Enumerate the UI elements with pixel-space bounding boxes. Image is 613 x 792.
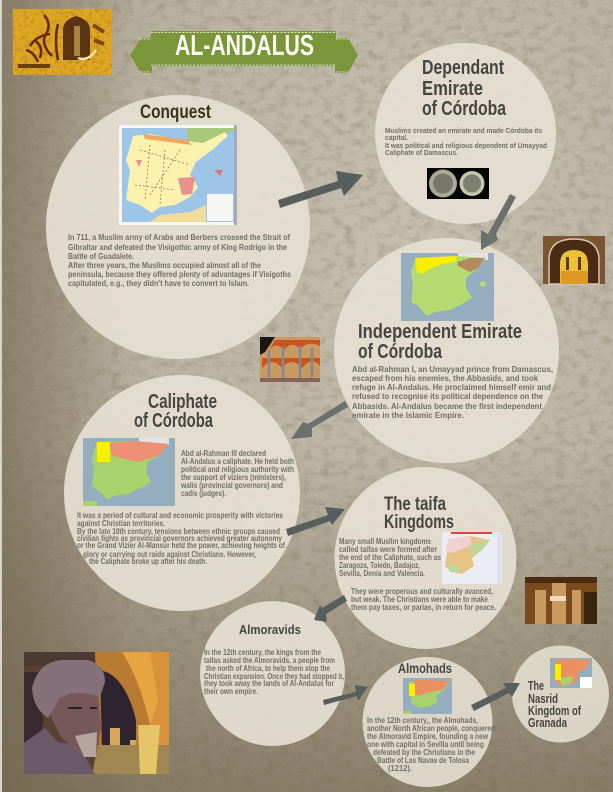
- text: caliphate right column: walis (provincial governors) and: [180, 481, 283, 490]
- text: conquest: peninsula, because they offered plenty of advantages if Visigoths: [68, 270, 291, 279]
- heading: almoravids: Almoravids: [239, 622, 301, 637]
- text: caliphate right column: Abd al-Rahman III declared: [181, 449, 266, 458]
- heading: taifa kingdoms: Kingdoms: [384, 512, 454, 533]
- text: almohads: another North African people, conquered: [367, 724, 495, 733]
- text: conquest: capitulated, e.g., they didn't have to convert to Islam.: [68, 279, 249, 288]
- text: taifa left column: called taifas were formed after: [339, 545, 437, 554]
- text: independent emirate: refuge in Al-Andalus. He proclaimed himself emir and: [352, 382, 551, 392]
- text: caliphate right column: cadis (judges).: [181, 489, 226, 498]
- text: taifa left column: Sevilla, Denia and Valencia.: [339, 569, 425, 578]
- arrow: caliphate to taifa: [286, 507, 345, 536]
- text: almohads: [367, 716, 495, 773]
- heading: nasrid kingdom: [528, 678, 581, 730]
- text: almohads: (1212).: [388, 764, 412, 773]
- heading: nasrid kingdom: Nasrid: [528, 691, 558, 706]
- arrow: almoravids to almohads: [323, 685, 368, 705]
- map: Iberian peninsula conquest: [119, 125, 237, 225]
- heading: caliphate: [134, 391, 217, 432]
- text: caliphate lower: civilian fights as provincial governors achieved greater autonomy: [77, 534, 282, 543]
- image: carved columns: [525, 577, 597, 624]
- text: independent emirate: escaped from his enemies, the Abbasids, and took: [352, 373, 538, 383]
- map: almohads: [403, 678, 452, 714]
- heading: almohads: Almohads: [398, 660, 452, 676]
- image: two coins: [427, 168, 489, 199]
- text: taifa lower: They were properous and culturally avanced,: [351, 587, 493, 596]
- text: caliphate lower: [77, 511, 285, 566]
- heading: taifa kingdoms: The taifa: [384, 494, 446, 515]
- text: almoravids: taifas asked the Almoravids, a people from: [204, 656, 335, 665]
- heading: independent emirate: Independent Emirate: [358, 321, 522, 343]
- panel: conquest: [46, 95, 310, 359]
- panel: taifa kingdoms: [334, 467, 516, 649]
- text: caliphate lower: or the Grand Vizier Al-Mansur held the power, achieving heights of: [77, 541, 285, 550]
- text: conquest: [68, 233, 291, 288]
- text: almohads: the Almoravid Empire, founding a new: [367, 732, 489, 741]
- text: dependant emirate: Caliphate of Damascus.: [385, 148, 458, 157]
- text: conquest: Battle of Guadalete.: [68, 252, 134, 261]
- heading: caliphate: Caliphate: [148, 391, 217, 413]
- text: caliphate right column: Al-Andalus a caliphate. He held both: [181, 457, 294, 466]
- image: golden calligraphy: [13, 9, 112, 75]
- heading: independent emirate: of Córdoba: [358, 341, 443, 363]
- map: independent emirate: [401, 253, 494, 321]
- text: dependant emirate: It was political and religious dependent of Umayyad: [385, 141, 547, 150]
- text: almohads: In the 12th century,, the Almohads,: [367, 716, 478, 725]
- arrow: conquest to dependant emirate: [278, 171, 363, 208]
- text: independent emirate: Abbasids. Al-Andalus became the first independent: [352, 401, 542, 411]
- text: conquest: In 711, a Muslim army of Arabs and Berbers crossed the Strait of: [68, 233, 290, 242]
- heading: taifa kingdoms: [384, 494, 454, 533]
- image: philosopher bust: [24, 652, 169, 774]
- text: caliphate lower: By the late 10th century, tensions between ethnic groups caused: [77, 527, 280, 536]
- text: taifa left column: the end of the Caliphate, such as: [339, 553, 441, 562]
- text: independent emirate: emirate in the Islamic Empire.: [352, 410, 464, 420]
- image: mosque columns: [260, 337, 320, 382]
- text: caliphate right column: political and religious authority with: [181, 465, 294, 474]
- panel: almohads: [362, 657, 495, 787]
- text: taifa left column: Zaragoza, Toledo, Badajoz,: [339, 561, 420, 570]
- title banner: [130, 30, 358, 73]
- heading: conquest: Conquest: [140, 101, 211, 123]
- heading: nasrid kingdom: Granada: [528, 715, 568, 730]
- text: caliphate right column: the support of viziers (ministers),: [181, 473, 286, 482]
- arrow: taifa to almoravids: [314, 595, 347, 622]
- panel: nasrid kingdom: [512, 646, 609, 742]
- heading: nasrid kingdom: Kingdom of: [528, 703, 581, 718]
- map: caliphate: [83, 438, 175, 506]
- text: taifa left column: Many small Muslim kingdoms: [339, 537, 431, 546]
- text: almoravids: the north of Africa, to help them stop the: [206, 664, 330, 673]
- text: conquest: Gibraltar and defeated the Visigothic army of King Rodrigo in the: [68, 243, 287, 252]
- panel: almoravids: [200, 601, 345, 746]
- text: caliphate lower: glory or carrying out raids against Christians. However,: [83, 550, 256, 559]
- text: independent emirate: refused to recognise its political dependence on the: [352, 391, 543, 401]
- text: independent emirate: [352, 364, 553, 420]
- text: caliphate right column: [180, 449, 294, 498]
- panel: dependant emirate: [375, 43, 556, 224]
- text: dependant emirate: Muslims created an emirate and made Córdoba its: [385, 126, 542, 135]
- heading: caliphate: of Córdoba: [134, 410, 214, 432]
- text: almoravids: [204, 648, 344, 696]
- arrow: almohads to nasrid: [471, 683, 520, 711]
- text: almohads: one with capital in Sevilla until being: [367, 740, 484, 749]
- arrow: independent emirate to caliphate: [291, 401, 348, 439]
- text: almoravids: In the 12th century, the kings from the: [204, 648, 321, 657]
- text: caliphate lower: It was a period of cultural and economic prosperity with victories: [77, 511, 283, 520]
- heading: independent emirate: [358, 321, 522, 363]
- map: taifa kingdoms: [442, 532, 502, 584]
- heading: dependant emirate: of Córdoba: [422, 98, 507, 120]
- panel: caliphate of cordoba: [64, 375, 300, 611]
- text: taifa left column: [339, 537, 441, 578]
- text: almoravids: Christian expansion. Once they had stopped it,: [204, 672, 344, 681]
- text: taifa lower: [351, 587, 496, 612]
- heading: dependant emirate: Dependant: [422, 57, 504, 79]
- text: almohads: Battle of Las Navas de Tolosa: [377, 756, 469, 765]
- arrow: dependant to independent emirate: [481, 194, 516, 250]
- text: almohads: defeated by the Christians in the: [373, 748, 475, 757]
- text: almoravids: they took away the lands of Al-Andalus for: [204, 679, 334, 688]
- heading: nasrid kingdom: The: [528, 678, 544, 693]
- title banner: AL-ANDALUS: [175, 30, 314, 62]
- heading: dependant emirate: [422, 57, 507, 120]
- text: caliphate lower: the Caliphate broke up after his death.: [89, 557, 207, 566]
- map: nasrid kingdom: [550, 658, 592, 688]
- text: caliphate lower: against Christian territories.: [77, 519, 165, 528]
- text: taifa lower: them pay taxes, or parias, in return for peace.: [351, 603, 496, 612]
- heading: dependant emirate: Emirate: [422, 78, 483, 100]
- image: mihrab arch: [543, 236, 605, 284]
- text: independent emirate: Abd al-Rahman I, an Umayyad prince from Damascus,: [352, 364, 553, 374]
- text: dependant emirate: capital.: [385, 133, 408, 142]
- text: dependant emirate: [385, 126, 547, 157]
- text: taifa lower: but weak. The Christians were able to make: [351, 595, 488, 604]
- panel: independent emirate: [334, 238, 559, 463]
- text: almoravids: their own empire.: [204, 687, 258, 696]
- text: conquest: After three years, the Muslims occupied almost all of the: [68, 261, 261, 270]
